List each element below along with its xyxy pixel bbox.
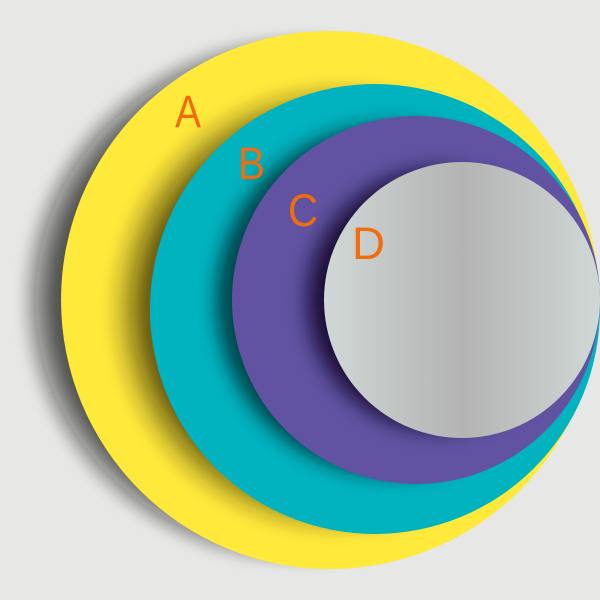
circle C: purple [232, 116, 600, 484]
circle D: gray [324, 162, 600, 438]
circle D shadow [294, 156, 486, 444]
circle B shadow [106, 80, 388, 538]
label B: B [238, 138, 265, 189]
label A: A [175, 86, 201, 137]
label D: D [352, 218, 385, 269]
circle C shadow [203, 111, 441, 489]
label C: C [288, 185, 318, 236]
circle B: teal [150, 84, 600, 534]
